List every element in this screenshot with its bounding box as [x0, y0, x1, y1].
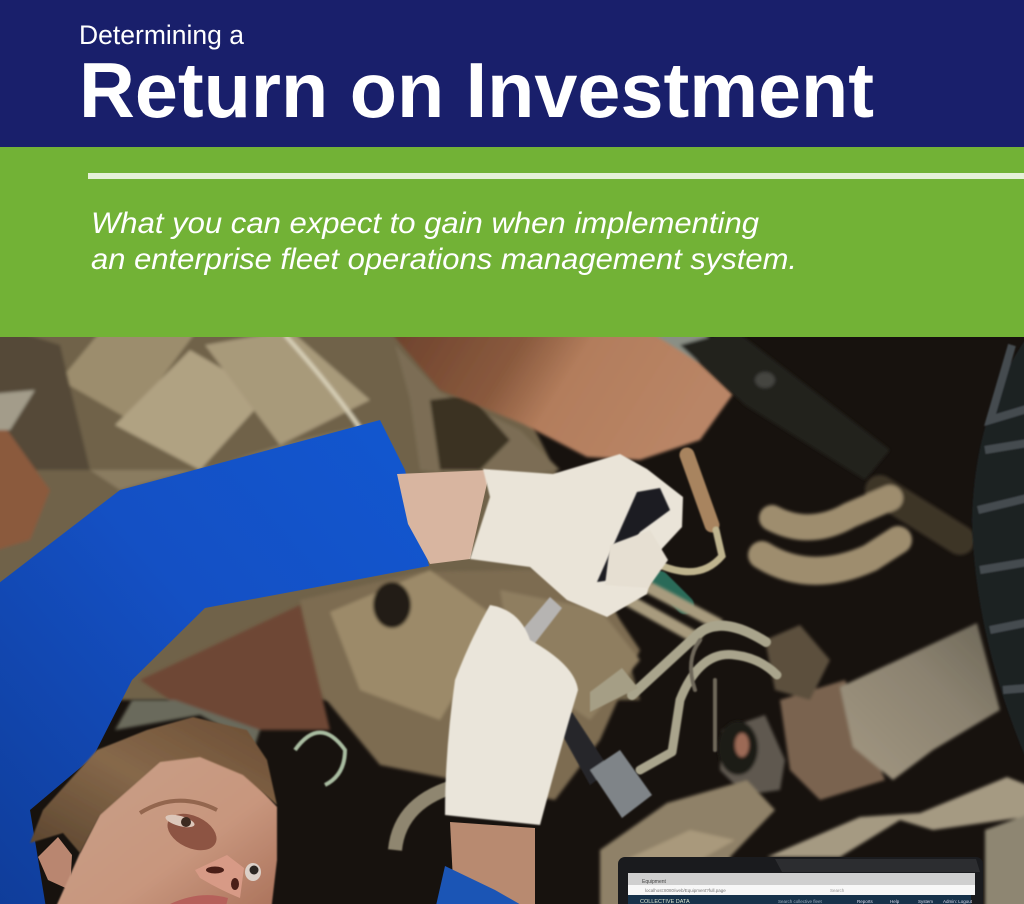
kicker: Determining a: Determining a: [79, 20, 245, 50]
lips: [170, 895, 228, 904]
laptop showing software: Admin: Logout: [943, 899, 973, 904]
coiled hoses: [762, 490, 960, 571]
laptop showing software: Search collective fleet: [778, 899, 823, 904]
subtitle text: [91, 207, 797, 276]
upper glove: [470, 454, 683, 617]
laptop showing software: Help: [890, 899, 900, 904]
lower centre hoses: [295, 732, 460, 850]
laptop showing software: [618, 857, 983, 904]
lower forearm and cuff: [435, 822, 535, 904]
ear: [38, 837, 72, 890]
laptop showing software: localhost:8080/web/Equipment?full.page: [645, 888, 726, 893]
rubber boot and drive shaft: [718, 623, 1000, 800]
tool handle: [597, 488, 670, 582]
lower left rust section and grey panel: [115, 605, 330, 745]
mechanic's head: [30, 717, 277, 904]
tyre: [972, 342, 1024, 754]
oxygen sensor and wire: [660, 455, 722, 605]
laptop showing software: Reports: [857, 899, 874, 904]
hair: [30, 717, 277, 853]
brake lines: [590, 626, 777, 770]
app navigation bar: [628, 895, 971, 904]
laptop showing software: System: [918, 899, 933, 904]
laptop showing software: Search: [830, 888, 845, 893]
socket wrench: [524, 596, 652, 818]
lower glove: [445, 605, 578, 825]
brow and eye socket: [140, 801, 217, 813]
left eye: [166, 814, 194, 828]
laptop showing software: Equipment: [642, 879, 667, 885]
subtitle text: an enterprise fleet operations management system.: [91, 243, 797, 276]
nose: [195, 855, 244, 898]
browser toolbar: [628, 885, 975, 895]
right eye: [245, 863, 261, 881]
subtitle text: What you can expect to gain when implementing: [91, 207, 759, 240]
green subtitle panel: [0, 147, 1024, 337]
face: [50, 752, 277, 904]
blue sleeve, upper arm: [0, 420, 429, 904]
browser tab bar: [628, 873, 975, 885]
rusty exhaust pipe: [394, 337, 734, 462]
glove fingers: [605, 530, 668, 588]
gearbox casing: [300, 570, 720, 800]
vehicle underbody, upper left: [0, 320, 640, 700]
photo: mechanic working under a vehicle: [0, 320, 1024, 904]
lower chassis: [600, 777, 1024, 904]
title: Return on Investment: Return on Investment: [79, 46, 874, 134]
forearm: [397, 470, 490, 564]
light chassis strip and dark bracket: [647, 330, 890, 480]
header band: [0, 0, 1024, 147]
